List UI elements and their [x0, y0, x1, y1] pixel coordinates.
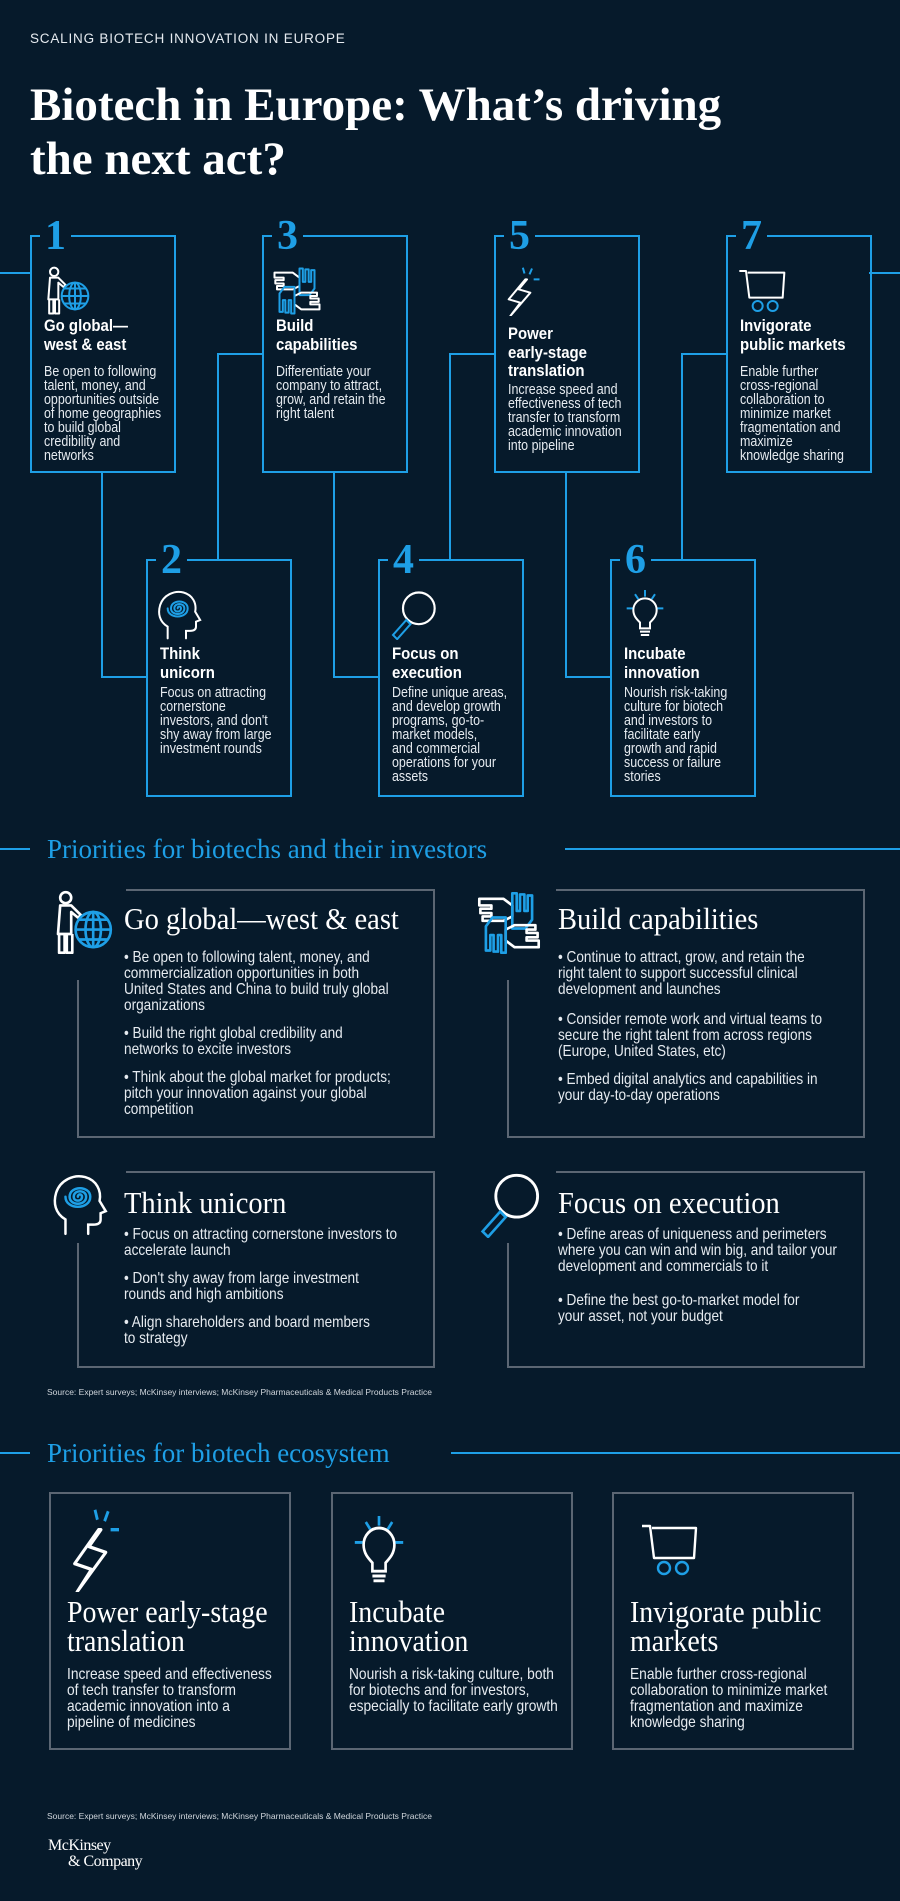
step 3: 3 [277, 213, 298, 259]
icon: person globe [47, 266, 90, 314]
ecosystem: power early-stage: translation [67, 1623, 185, 1658]
icon: cart [739, 270, 786, 312]
panel: go global: • Think about the global market for products; [124, 1069, 391, 1086]
logo [48, 1837, 143, 1870]
icon: person globe [56, 890, 112, 954]
title [30, 79, 721, 185]
panel: think unicorn: • Focus on attracting cornerstone investors to [124, 1226, 397, 1243]
step 6: 6 [625, 537, 646, 583]
ecosystem: incubate: for biotechs and for investors, [349, 1682, 530, 1699]
step 3: company to attract, [276, 378, 382, 394]
panel: build capabilities: (Europe, United States, etc) [558, 1043, 726, 1060]
step 7: 7 [741, 213, 762, 259]
step 1: west & east [44, 335, 126, 354]
step 7: public markets [740, 335, 846, 354]
panel: build capabilities: development and launches [558, 981, 721, 998]
icon: cart [642, 1524, 698, 1576]
step 7: Invigorate [740, 316, 812, 335]
step 1: to build global [44, 420, 121, 436]
panel: think unicorn: • Don't shy away from large investment [124, 1270, 359, 1287]
step 1: Be open to following [44, 364, 156, 380]
panel: think unicorn: rounds and high ambitions [124, 1286, 284, 1303]
step 5: Increase speed and [508, 382, 618, 398]
step 3: grow, and retain the [276, 392, 386, 408]
step 6: innovation [624, 663, 700, 682]
step 1: Go global— [44, 316, 128, 335]
step 6: Nourish risk-taking [624, 685, 727, 701]
step 3: capabilities [276, 335, 357, 354]
step 4: Focus on [392, 644, 458, 663]
icon: bulb [626, 590, 664, 636]
step 2: cornerstone [160, 699, 226, 715]
ecosystem: incubate: innovation [349, 1623, 468, 1658]
step 4: assets [392, 769, 428, 785]
panel: go global: organizations [124, 997, 205, 1014]
panel: build capabilities: • Consider remote work and virtual teams to [558, 1011, 822, 1028]
step 6: success or failure [624, 755, 721, 771]
icon: hands [478, 892, 540, 954]
step 2 [146, 559, 292, 797]
step 4: market models, [392, 727, 477, 743]
source 2: Source: Expert surveys; McKinsey interviews; McKinsey Pharmaceuticals & Medical Products Practice [47, 1811, 432, 1821]
step 6: stories [624, 769, 661, 785]
panel: build capabilities: • Embed digital analytics and capabilities in [558, 1071, 818, 1088]
step 6: growth and rapid [624, 741, 717, 757]
step 4: and develop growth [392, 699, 501, 715]
logo: McKinsey [48, 1837, 111, 1854]
step 5: transfer to transform [508, 410, 620, 426]
panel: build capabilities: • Continue to attract, grow, and retain the [558, 949, 805, 966]
panel: build capabilities: your day-to-day operations [558, 1087, 720, 1104]
panel: focus on execution: • Define areas of uniqueness and perimeters [558, 1226, 827, 1243]
step 7: maximize [740, 434, 793, 450]
ecosystem: invigorate: Enable further cross-regional [630, 1666, 807, 1683]
icon: bolt [508, 267, 540, 316]
logo: & Company [68, 1853, 142, 1870]
step 4: operations for your [392, 755, 496, 771]
step 1: of home geographies [44, 406, 161, 422]
icon: hands [274, 268, 320, 314]
ecosystem: invigorate: knowledge sharing [630, 1714, 745, 1731]
step 5: Power [508, 324, 553, 343]
panel: think unicorn: Think unicorn [124, 1185, 286, 1220]
step 5: 5 [509, 213, 530, 259]
icon: bulb [354, 1516, 404, 1582]
step 4: Define unique areas, [392, 685, 507, 701]
step 1: credibility and [44, 434, 120, 450]
ecosystem: power early-stage: Increase speed and effectiveness [67, 1666, 272, 1683]
step 7: minimize market [740, 406, 831, 422]
ecosystem: power early-stage [49, 1492, 291, 1750]
panel: go global [56, 889, 435, 1138]
step 6: Incubate [624, 644, 686, 663]
panel: focus on execution: development and commercials to it [558, 1258, 768, 1275]
step 3 [262, 235, 408, 473]
step 5: effectiveness of tech [508, 396, 621, 412]
step 7: fragmentation and [740, 420, 841, 436]
panel: build capabilities: right talent to support successful clinical [558, 965, 798, 982]
step 2: Focus on attracting [160, 685, 266, 701]
step 5: translation [508, 361, 584, 380]
section heading 1: Priorities for biotechs and their investors [47, 834, 487, 864]
step 2: investors, and don't [160, 713, 268, 729]
panel: think unicorn: to strategy [124, 1330, 187, 1347]
panel: go global: Go global—west & east [124, 901, 399, 936]
step 2: investment rounds [160, 741, 262, 757]
panel: go global: competition [124, 1101, 194, 1118]
step 7 [726, 235, 872, 473]
step 1 [30, 235, 176, 473]
panel: think unicorn: accelerate launch [124, 1242, 231, 1259]
title: Biotech in Europe: What’s driving [30, 79, 721, 131]
ecosystem: incubate: especially to facilitate early growth [349, 1698, 558, 1715]
step 1: opportunities outside [44, 392, 159, 408]
panel: focus on execution: • Define the best go-to-market model for [558, 1292, 799, 1309]
step 4: and commercial [392, 741, 480, 757]
step 1: networks [44, 448, 94, 464]
ecosystem: invigorate: fragmentation and maximize [630, 1698, 803, 1715]
step 2: Think [160, 644, 200, 663]
panel: go global: pitch your innovation against your global [124, 1085, 367, 1102]
step 6: and investors to [624, 713, 712, 729]
kicker: SCALING BIOTECH INNOVATION IN EUROPE [30, 31, 346, 46]
icon: head [54, 1175, 108, 1236]
step 4: 4 [393, 537, 414, 583]
panel: go global: networks to excite investors [124, 1041, 291, 1058]
step 1: talent, money, and [44, 378, 146, 394]
ecosystem: invigorate: collaboration to minimize market [630, 1682, 827, 1699]
ecosystem: incubate: Incubate [349, 1594, 445, 1629]
step 4: execution [392, 663, 462, 682]
panel: go global: • Build the right global credibility and [124, 1025, 343, 1042]
step 6 [610, 559, 756, 797]
ecosystem: invigorate [612, 1492, 854, 1750]
section heading 2: Priorities for biotech ecosystem [47, 1438, 390, 1468]
step 7: knowledge sharing [740, 448, 844, 464]
ecosystem: invigorate: markets [630, 1623, 718, 1658]
ecosystem: power early-stage: Power early-stage [67, 1594, 268, 1629]
panel: build capabilities [478, 889, 865, 1138]
step 1: 1 [45, 213, 66, 259]
panel: focus on execution: Focus on execution [558, 1185, 780, 1220]
panel: focus on execution: your asset, not your budget [558, 1308, 723, 1325]
step 2: 2 [161, 537, 182, 583]
step 5 [494, 235, 640, 473]
icon: bolt [73, 1509, 119, 1592]
icon: magnifier [392, 591, 436, 640]
ecosystem: invigorate: Invigorate public [630, 1594, 821, 1629]
step 5: early-stage [508, 343, 587, 362]
connectors [0, 272, 900, 678]
panel: go global: • Be open to following talent, money, and [124, 949, 370, 966]
icon: magnifier [480, 1174, 540, 1238]
panel: build capabilities: Build capabilities [558, 901, 758, 936]
panel: think unicorn [54, 1171, 435, 1368]
panel: go global: commercialization opportunities in both [124, 965, 359, 982]
step 6: facilitate early [624, 727, 700, 743]
step 5: into pipeline [508, 438, 575, 454]
step 3: right talent [276, 406, 334, 422]
panel: focus on execution [480, 1171, 865, 1368]
title: the next act? [30, 133, 286, 185]
step 7: Enable further [740, 364, 818, 380]
panel: think unicorn: • Align shareholders and board members [124, 1314, 370, 1331]
step 2: shy away from large [160, 727, 272, 743]
ecosystem: power early-stage: academic innovation into a [67, 1698, 230, 1715]
step 3: Differentiate your [276, 364, 371, 380]
step 6: culture for biotech [624, 699, 723, 715]
step 4 [378, 559, 524, 797]
ecosystem: incubate [331, 1492, 573, 1750]
step 7: cross-regional [740, 378, 818, 394]
step 4: programs, go-to- [392, 713, 484, 729]
ecosystem: incubate: Nourish a risk-taking culture, both [349, 1666, 554, 1683]
panel: go global: United States and China to build truly global [124, 981, 389, 998]
icon: head [158, 590, 202, 640]
panel: focus on execution: where you can win and win big, and tailor your [558, 1242, 837, 1259]
ecosystem: power early-stage: of tech transfer to transform [67, 1682, 236, 1699]
source 1: Source: Expert surveys; McKinsey interviews; McKinsey Pharmaceuticals & Medical Products Practice [47, 1387, 432, 1397]
step 7: collaboration to [740, 392, 825, 408]
ecosystem: power early-stage: pipeline of medicines [67, 1714, 196, 1731]
step 2: unicorn [160, 663, 215, 682]
step 5: academic innovation [508, 424, 622, 440]
panel: build capabilities: secure the right talent from across regions [558, 1027, 812, 1044]
step 3: Build [276, 316, 313, 335]
